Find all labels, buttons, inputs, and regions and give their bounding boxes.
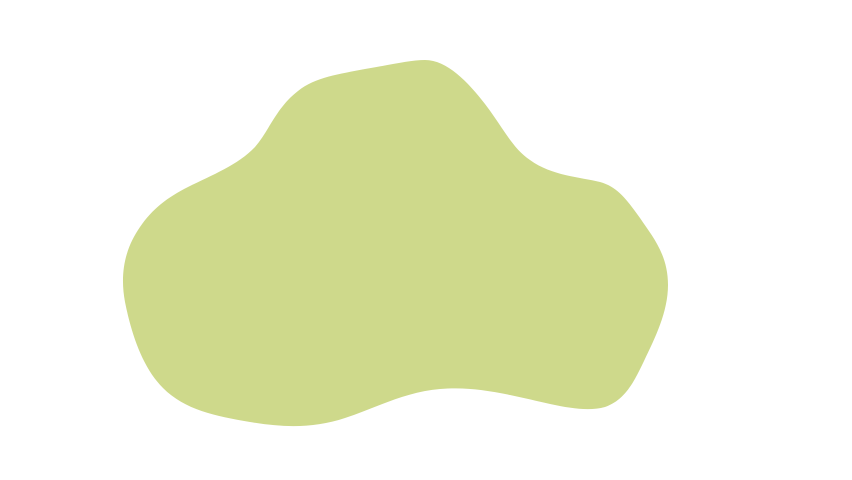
green blob shape — [123, 60, 668, 426]
